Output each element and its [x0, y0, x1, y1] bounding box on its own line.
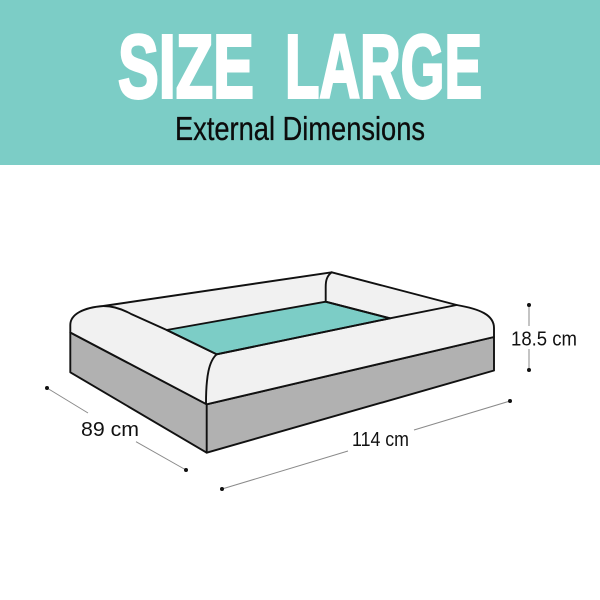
- label: 89 cm: 89 cm: [81, 419, 139, 441]
- illustration: pet bed: [70, 272, 494, 453]
- dimension: height 18.5 cm: [511, 303, 577, 372]
- dimension: width 89 cm: [45, 386, 188, 472]
- bed base side panels: [70, 332, 494, 453]
- label: 18.5 cm: 18.5 cm: [511, 328, 577, 350]
- header band: [0, 0, 600, 165]
- teal sleeping surface: [167, 302, 390, 354]
- subtitle: External Dimensions: [175, 110, 425, 147]
- title: SIZE: [118, 18, 254, 118]
- dimension: length 114 cm: [220, 399, 512, 491]
- inner bolster lines: [103, 272, 457, 453]
- bed cushion top: [70, 272, 494, 404]
- label: 114 cm: 114 cm: [352, 429, 409, 451]
- title: [118, 18, 482, 118]
- title: LARGE: [285, 18, 482, 118]
